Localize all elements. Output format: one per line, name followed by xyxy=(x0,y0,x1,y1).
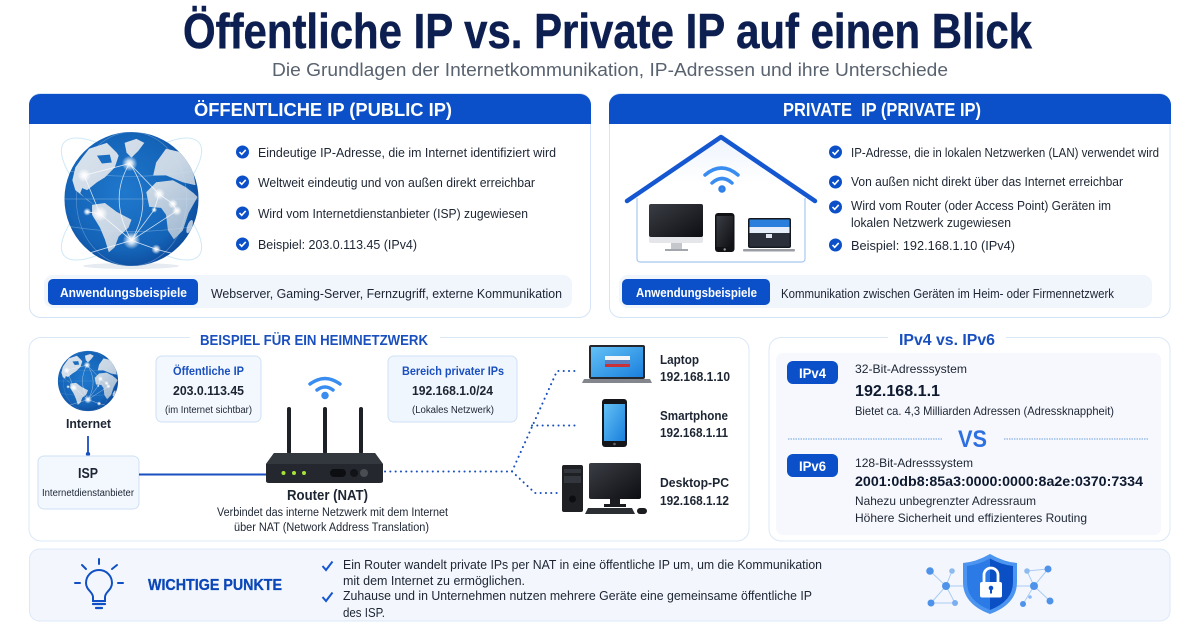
vs divider: VS xyxy=(958,426,987,453)
ipv6 block: IPv6 xyxy=(799,459,826,474)
ipv4 block: 192.168.1.1 xyxy=(855,383,940,400)
public ip header xyxy=(29,94,591,124)
laptop label: Laptop xyxy=(660,353,699,367)
private ip header xyxy=(609,94,1171,124)
smartphone label: 192.168.1.11 xyxy=(660,426,728,440)
private ip use cases xyxy=(619,275,1152,308)
ipv6 block: 128-Bit-Adresssystem xyxy=(855,456,973,470)
private ip bullet list: Beispiel: 192.168.1.10 (IPv4) xyxy=(851,238,1015,253)
key points list: Zuhause und in Unternehmen nutzen mehrere Geräte eine gemeinsame öffentliche IP xyxy=(343,589,812,603)
panel: ipv4 vs ipv6 xyxy=(769,332,1170,541)
isp box: Internetdienstanbieter xyxy=(42,488,135,499)
ipv4 block xyxy=(787,361,1114,418)
key points list xyxy=(322,558,822,620)
public ip header: ÖFFENTLICHE IP (PUBLIC IP) xyxy=(194,100,452,120)
icon: wifi xyxy=(705,168,738,192)
icon: house with devices xyxy=(627,137,815,262)
private ip bullet list: lokalen Netzwerk zugewiesen xyxy=(851,215,1011,230)
desktop label: 192.168.1.12 xyxy=(660,494,729,508)
router description: Verbindet das interne Netzwerk mit dem Internet xyxy=(217,507,449,519)
key points list: Ein Router wandelt private IPs per NAT in eine öffentliche IP um, um die Kommunikation xyxy=(343,558,822,572)
public ip bullet list: Wird vom Internetdienstanbieter (ISP) zugewiesen xyxy=(258,206,528,221)
title: Öffentliche IP vs. Private IP auf einen Blick xyxy=(183,5,1033,59)
private ip bullet list xyxy=(829,145,1159,253)
subtitle: Die Grundlagen der Internetkommunikation, IP-Adressen und ihre Unterschiede xyxy=(272,59,948,80)
icon: router xyxy=(266,407,383,483)
smartphone label xyxy=(660,409,728,440)
public ip bullet list: Eindeutige IP-Adresse, die im Internet identifiziert wird xyxy=(258,145,556,160)
laptop label: 192.168.1.10 xyxy=(660,370,730,384)
public ip bullet list: Weltweit eindeutig und von außen direkt erreichbar xyxy=(258,175,536,190)
ipv6 block xyxy=(787,454,1143,525)
private ip bullet list: Von außen nicht direkt über das Internet erreichbar xyxy=(851,174,1124,189)
public ip use cases: Webserver, Gaming-Server, Fernzugriff, externe Kommunikation xyxy=(211,286,562,301)
public ip callout: (im Internet sichtbar) xyxy=(165,405,252,416)
icon: security shield network xyxy=(926,554,1054,614)
desktop label xyxy=(660,476,729,508)
connector: dotted lan lines xyxy=(385,371,579,493)
icon: internet globe xyxy=(58,351,118,411)
private range callout: Bereich privater IPs xyxy=(402,364,504,378)
ipv6 block: 2001:0db8:85a3:0000:0000:8a2e:0370:7334 xyxy=(855,473,1143,489)
key points heading: WICHTIGE PUNKTE xyxy=(148,577,282,594)
connector: isp to router xyxy=(139,474,267,476)
private ip use cases: Anwendungsbeispiele xyxy=(636,285,757,300)
public ip use cases xyxy=(44,275,572,308)
public ip use cases: Anwendungsbeispiele xyxy=(60,285,187,300)
private range callout xyxy=(388,356,517,422)
router description xyxy=(217,507,449,534)
private ip header: PRIVATE IP (PRIVATE IP) xyxy=(783,100,981,120)
panel: key points xyxy=(30,549,1170,621)
ipv4 block: Bietet ca. 4,3 Milliarden Adressen (Adressknappheit) xyxy=(855,404,1114,418)
router description: über NAT (Network Address Translation) xyxy=(234,522,429,534)
icon: phone xyxy=(715,213,734,252)
ipv panel heading: IPv4 vs. IPv6 xyxy=(899,332,995,349)
icon: globe xyxy=(45,119,218,279)
private range callout: 192.168.1.0/24 xyxy=(412,384,493,398)
private range callout: (Lokales Netzwerk) xyxy=(412,405,494,416)
home network heading: BEISPIEL FÜR EIN HEIMNETZWERK xyxy=(200,332,428,349)
ipv6 block: Nahezu unbegrenzter Adressraum xyxy=(855,494,1036,508)
isp box: ISP xyxy=(78,466,98,482)
icon: laptop xyxy=(743,218,795,252)
public ip bullet list: Beispiel: 203.0.113.45 (IPv4) xyxy=(258,237,417,252)
ipv4 block: 32-Bit-Adresssystem xyxy=(855,362,967,376)
key points list: des ISP. xyxy=(343,606,385,620)
connector: internet to isp xyxy=(86,436,90,456)
smartphone label: Smartphone xyxy=(660,409,728,423)
ipv4 block: IPv4 xyxy=(799,366,826,381)
private ip use cases: Kommunikation zwischen Geräten im Heim- oder Firmennetzwerk xyxy=(781,287,1115,301)
public ip callout: 203.0.113.45 xyxy=(173,384,244,398)
ipv6 block: Höhere Sicherheit und effizienteres Routing xyxy=(855,511,1087,525)
laptop label xyxy=(660,353,730,384)
isp box xyxy=(38,456,139,509)
desktop label: Desktop-PC xyxy=(660,476,729,490)
icon: light bulb xyxy=(75,559,123,608)
internet label: Internet xyxy=(66,417,112,431)
router label: Router (NAT) xyxy=(287,487,368,504)
private ip bullet list: IP-Adresse, die in lokalen Netzwerken (LAN) verwendet wird xyxy=(851,145,1159,160)
icon: desktop pc xyxy=(562,463,647,514)
panel: home network xyxy=(29,332,749,541)
icon: desktop monitor xyxy=(649,204,703,251)
panel: private ip xyxy=(609,94,1171,318)
key points list: mit dem Internet zu ermöglichen. xyxy=(343,574,525,588)
panel: public ip xyxy=(29,94,591,318)
private ip bullet list: Wird vom Router (oder Access Point) Geräten im xyxy=(851,198,1111,213)
icon: laptop xyxy=(582,345,652,383)
icon: router wifi xyxy=(310,378,340,398)
icon: smartphone xyxy=(602,399,627,447)
public ip callout xyxy=(156,356,261,422)
public ip bullet list xyxy=(236,145,556,252)
public ip callout: Öffentliche IP xyxy=(173,363,244,378)
